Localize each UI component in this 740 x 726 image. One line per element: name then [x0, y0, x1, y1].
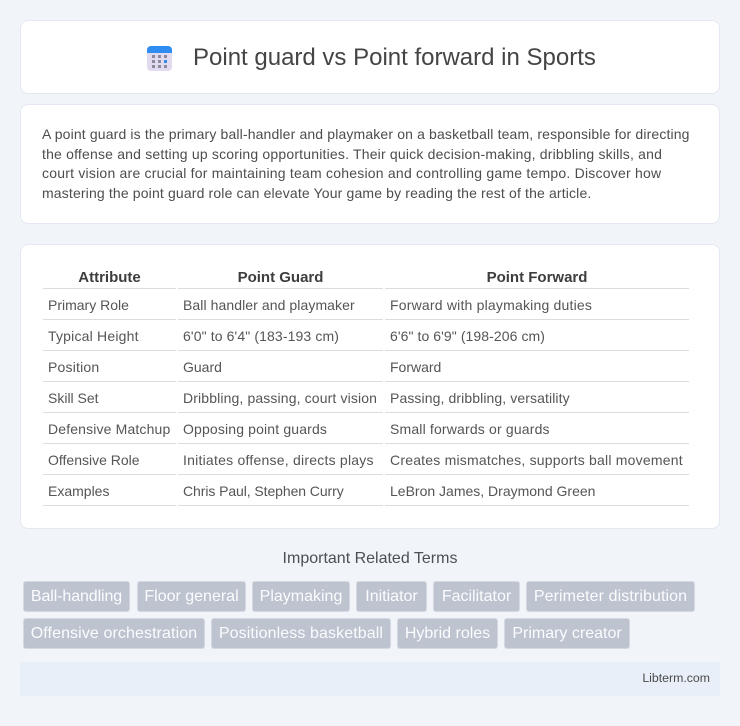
- intro text: mastering the point guard role can elevate Your game by reading the rest of the article.: [42, 185, 591, 201]
- table header: Point Guard: Point Guard: [238, 269, 323, 286]
- comparison table card: [20, 244, 720, 529]
- tag: [137, 581, 246, 612]
- tag: Hybrid roles: [405, 625, 490, 642]
- row: Primary Role: Primary Role: [48, 297, 129, 313]
- footer bar: [20, 662, 720, 696]
- tag: [397, 618, 498, 649]
- row: Typical Height: [48, 328, 545, 344]
- tag: [23, 618, 205, 649]
- tag: Facilitator: [442, 588, 511, 605]
- icon: calendar: [147, 46, 172, 71]
- row: Defensive Matchup: Opposing point guards: [183, 421, 327, 437]
- tag: [526, 581, 695, 612]
- comparison table: [43, 269, 689, 506]
- row: Defensive Matchup: Small forwards or guards: [390, 421, 550, 437]
- row: Primary Role: Forward with playmaking duties: [390, 297, 592, 313]
- row: Examples: [48, 483, 595, 499]
- row: Skill Set: [48, 390, 570, 406]
- footer source: Libterm.com: [642, 671, 710, 685]
- intro text: A point guard is the primary ball-handler and playmaker on a basketball team, responsible for directing: [42, 126, 690, 142]
- header card: [20, 20, 720, 94]
- row: Examples: Chris Paul, Stephen Curry: [183, 483, 344, 499]
- row: Skill Set: Skill Set: [48, 390, 99, 406]
- tag: [211, 618, 391, 649]
- intro card: [20, 104, 720, 224]
- related terms tags: [23, 581, 695, 649]
- tag: Primary creator: [512, 625, 622, 642]
- row: Offensive Role: Creates mismatches, supports ball movement: [390, 452, 683, 468]
- related terms heading: Important Related Terms: [283, 550, 457, 567]
- row: Typical Height: Typical Height: [48, 328, 139, 344]
- row: Offensive Role: Offensive Role: [48, 452, 140, 468]
- row: Primary Role: [48, 297, 592, 313]
- tag: [504, 618, 630, 649]
- row: Position: Guard: [183, 359, 222, 375]
- tag: Perimeter distribution: [534, 588, 687, 605]
- row: Skill Set: Passing, dribbling, versatility: [390, 390, 570, 406]
- tag: Ball-handling: [31, 588, 122, 605]
- row: Defensive Matchup: Defensive Matchup: [48, 421, 170, 437]
- tag: Positionless basketball: [219, 625, 383, 642]
- row: Examples: LeBron James, Draymond Green: [390, 483, 595, 499]
- table header: Point Forward: Point Forward: [487, 269, 587, 286]
- row: Position: Position: [48, 359, 99, 375]
- row: Offensive Role: [48, 452, 683, 468]
- row: Position: [48, 359, 441, 375]
- intro text: the offense and setting up scoring opportunities. Their quick decision-making, dribbling skills, and: [42, 146, 662, 162]
- tag: [23, 581, 130, 612]
- tag: [356, 581, 427, 612]
- row: Typical Height: 6'6" to 6'9" (198-206 cm): [390, 328, 545, 344]
- intro text: [42, 126, 690, 201]
- row: Defensive Matchup: [48, 421, 550, 437]
- table header: Attribute: Attribute: [78, 269, 141, 286]
- row: Position: Forward: [390, 359, 441, 375]
- tag: Playmaking: [260, 588, 342, 605]
- row: Offensive Role: Initiates offense, directs plays: [183, 452, 374, 468]
- tag: Floor general: [144, 588, 239, 605]
- title: Point guard vs Point forward in Sports: [193, 44, 596, 71]
- tag: [433, 581, 520, 612]
- tag: Initiator: [365, 588, 418, 605]
- tag: Offensive orchestration: [31, 625, 197, 642]
- intro text: court vision are crucial for maintaining team cohesion and controlling game tempo. Discover how: [42, 165, 661, 181]
- row: Primary Role: Ball handler and playmaker: [183, 297, 355, 313]
- tag: [252, 581, 350, 612]
- row: Examples: Examples: [48, 483, 109, 499]
- row: Typical Height: 6'0" to 6'4" (183-193 cm): [183, 328, 339, 344]
- row: Skill Set: Dribbling, passing, court vision: [183, 390, 377, 406]
